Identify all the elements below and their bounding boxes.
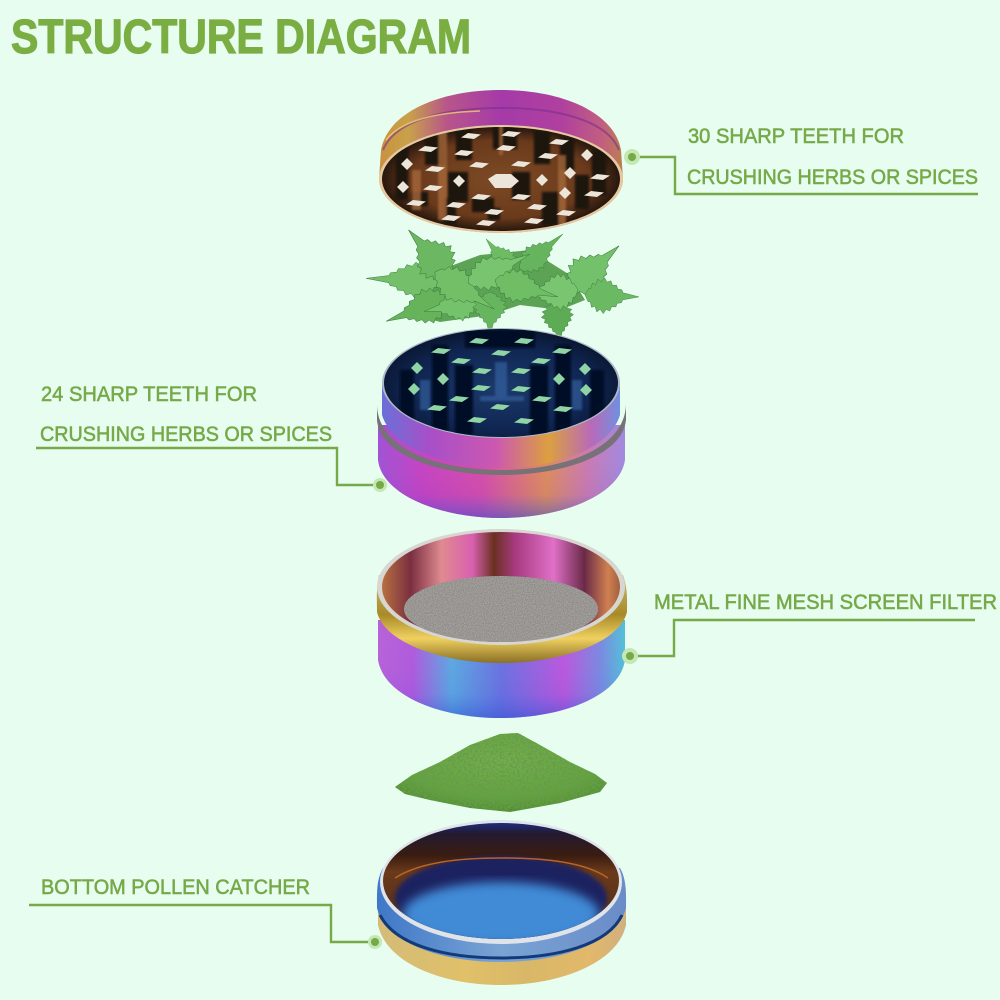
leaf cluster base (415, 250, 585, 322)
callout: 24 sharp teeth (36, 383, 387, 492)
marker dot (368, 935, 382, 949)
label: BOTTOM POLLEN CATCHER (41, 876, 310, 899)
callout: 30 sharp teeth (624, 125, 978, 194)
marker dot (622, 648, 638, 664)
lid recess blocks (396, 125, 606, 226)
catcher gold base (378, 905, 626, 985)
label: 30 SHARP TEETH FOR (688, 125, 904, 148)
chamber recess (400, 330, 604, 435)
mesh filter (404, 576, 598, 642)
leader line (630, 620, 975, 656)
chamber lower body (378, 425, 625, 518)
grinder bottom pollen catcher (377, 820, 626, 985)
label: 24 SHARP TEETH FOR (41, 383, 257, 406)
leader line (36, 448, 380, 485)
leader line (632, 157, 978, 194)
lid outer body (379, 90, 623, 233)
mint leaves (365, 216, 640, 347)
green powder pile (395, 733, 607, 812)
screen chamber gold threads (377, 575, 627, 663)
catcher rim and interior (380, 820, 622, 944)
label line 2: CRUSHING HERBS OR SPICES (40, 423, 332, 446)
screen chamber rim and wall (377, 529, 625, 645)
leader line (29, 905, 375, 942)
lid teeth (397, 131, 610, 226)
label line 2: CRUSHING HERBS OR SPICES (687, 166, 978, 189)
chamber inner face (382, 328, 620, 438)
marker dot (373, 478, 387, 492)
screen chamber body (378, 620, 625, 718)
marker dot (624, 149, 640, 165)
chamber ring (377, 405, 626, 475)
title: STRUCTURE DIAGRAM (11, 11, 471, 64)
grinder middle chamber with 24 teeth (377, 328, 626, 518)
chamber teeth (408, 338, 592, 424)
callout: pollen catcher (29, 876, 382, 949)
grinder lid with 30 teeth (379, 90, 623, 233)
catcher floor (395, 856, 607, 946)
chamber neck (382, 383, 620, 468)
callout: mesh screen (622, 591, 997, 664)
catcher blue threads (377, 868, 626, 962)
grinder mesh screen chamber (377, 529, 627, 718)
lid inner face (379, 125, 623, 233)
